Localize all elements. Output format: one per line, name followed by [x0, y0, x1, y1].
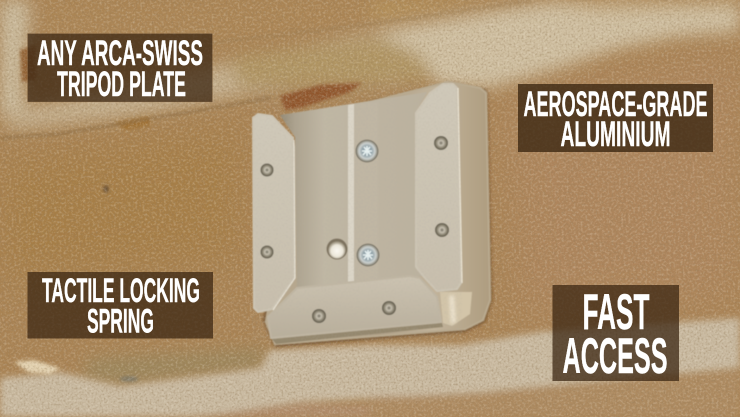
bracket back plate: [266, 82, 490, 344]
centre dovetail plate: [280, 92, 427, 288]
centre groove: [348, 104, 354, 282]
large screws: [356, 140, 379, 266]
small screws: [260, 136, 449, 323]
label: any arca-swiss tripod plate: TRIPOD PLATE: [57, 65, 186, 104]
label: tactile locking spring: TACTILE LOCKING: [42, 272, 200, 310]
spring ball: [326, 238, 348, 260]
label: tactile locking spring: [28, 272, 213, 340]
label: tactile locking spring: SPRING: [87, 302, 154, 340]
icon: metal bracket: [252, 82, 492, 347]
label: fast access: FAST: [582, 284, 650, 340]
label: aerospace-grade aluminium: [518, 84, 713, 154]
label: any arca-swiss tripod plate: ANY ARCA-SWISS: [37, 34, 203, 73]
label: fast access: [552, 284, 679, 384]
label: any arca-swiss tripod plate: [28, 34, 212, 104]
left rail: [253, 114, 294, 312]
centre strip: [354, 102, 378, 281]
machining grain on metal: [252, 83, 462, 340]
right rail: [416, 84, 461, 291]
bottom rail: [268, 276, 441, 338]
bracket shadow: [263, 82, 492, 347]
corner fillet: [440, 292, 472, 326]
